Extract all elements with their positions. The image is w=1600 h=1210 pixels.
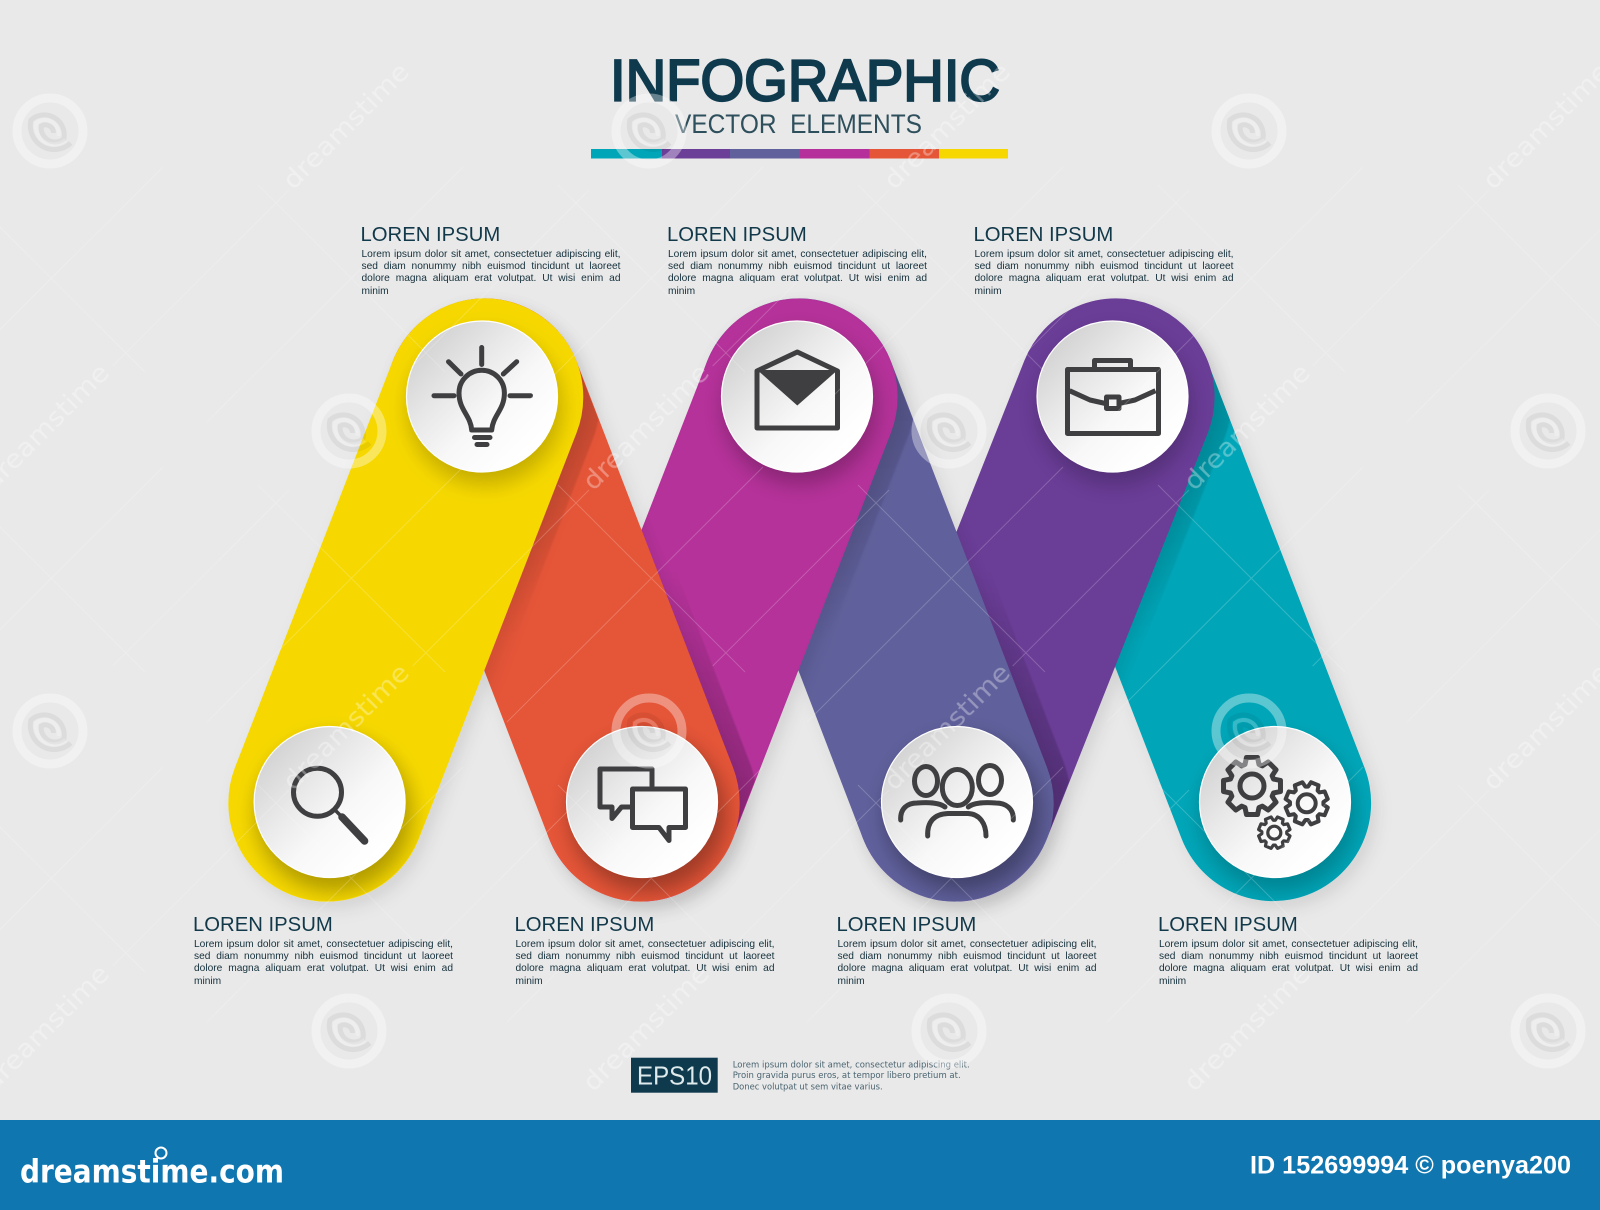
watermark text: dreamstime — [878, 658, 1017, 797]
text block: bottom 1: Lorem ipsum dolor sit amet, consectetuer adipiscing elit, — [194, 938, 453, 950]
text block: top 3: Lorem ipsum dolor sit amet, consectetuer adipiscing elit, — [974, 248, 1234, 260]
text block: top 2: dolore magna aliquam erat volutpat. Ut wisi enim ad — [668, 273, 927, 284]
watermark text: dreamstime — [277, 658, 416, 797]
text block: top 2: LOREN IPSUM — [667, 224, 807, 246]
title: INFOGRAPHIC — [610, 48, 1000, 114]
text block: bottom 4: minim — [1159, 976, 1186, 987]
text block: top 2 — [667, 224, 927, 297]
text block: bottom 4: sed diam nonummy nibh euismod tincidunt ut laoreet — [1159, 951, 1418, 962]
text block: bottom 1: LOREN IPSUM — [193, 914, 333, 936]
text block: bottom 4: dolore magna aliquam erat volutpat. Ut wisi enim ad — [1159, 963, 1418, 974]
EPS note text: Lorem ipsum dolor sit amet, consectetur adipiscing elit. — [733, 1060, 970, 1070]
text block: top 1 — [360, 224, 620, 297]
text block: bottom 2: dolore magna aliquam erat volutpat. Ut wisi enim ad — [516, 963, 774, 974]
text block: top 2: Lorem ipsum dolor sit amet, consectetuer adipiscing elit, — [668, 248, 927, 260]
text block: top 3 — [974, 224, 1234, 297]
icon disc: light bulb — [406, 321, 558, 472]
text block: bottom 3: sed diam nonummy nibh euismod tincidunt ut laoreet — [838, 951, 1096, 962]
footer banner — [0, 1120, 1600, 1210]
text block: bottom 3: LOREN IPSUM — [836, 914, 976, 936]
colour stripe under title — [591, 149, 1008, 158]
EPS10 badge: EPS10 — [637, 1060, 712, 1090]
text block: top 2: minim — [668, 286, 695, 297]
capsule: yellow — [229, 299, 583, 901]
icon disc: briefcase — [1037, 321, 1188, 472]
subtitle: VECTOR ELEMENTS — [675, 109, 922, 139]
text block: top 3: dolore magna aliquam erat volutpat. Ut wisi enim ad — [974, 273, 1234, 284]
EPS note text: Proin gravida purus eros, at tempor libero pretium at. — [733, 1071, 961, 1081]
disc shadows — [256, 331, 1356, 892]
watermark text: dreamstime — [1178, 358, 1317, 497]
watermark text: dreamstime — [577, 959, 716, 1098]
text block: bottom 1: minim — [194, 976, 221, 987]
text block: bottom 1: dolore magna aliquam erat volutpat. Ut wisi enim ad — [194, 963, 453, 974]
EPS note text: Donec volutpat ut sem vitae varius. — [733, 1082, 883, 1092]
text block: bottom 2 — [514, 914, 774, 987]
text block: bottom 2: sed diam nonummy nibh euismod tincidunt ut laoreet — [516, 951, 774, 962]
text block: bottom 2: LOREN IPSUM — [514, 914, 654, 936]
footer banner: dreamstime.com — [20, 1152, 284, 1190]
text block: bottom 4: Lorem ipsum dolor sit amet, consectetuer adipiscing elit, — [1159, 938, 1418, 950]
text block: top 2: sed diam nonummy nibh euismod tincidunt ut laoreet — [668, 261, 927, 272]
text block: top 1: dolore magna aliquam erat volutpat. Ut wisi enim ad — [362, 273, 620, 284]
text block: top 1: sed diam nonummy nibh euismod tincidunt ut laoreet — [362, 261, 620, 272]
text block: bottom 1: sed diam nonummy nibh euismod tincidunt ut laoreet — [194, 951, 453, 962]
watermark text: dreamstime — [878, 57, 1017, 196]
icon disc: people — [882, 726, 1032, 878]
text block: top 1: minim — [362, 286, 389, 297]
capsule: teal — [1018, 299, 1371, 901]
capsule: orange — [387, 299, 739, 901]
watermark spirals — [17, 98, 1581, 1064]
capsule: purple — [857, 299, 1214, 901]
text block: top 3: minim — [974, 286, 1002, 297]
watermark text: dreamstime — [1178, 959, 1317, 1098]
text block: bottom 3: dolore magna aliquam erat volutpat. Ut wisi enim ad — [838, 963, 1096, 974]
text block: bottom 3: minim — [838, 976, 865, 987]
capsule: magenta — [543, 299, 897, 901]
text block: top 1: Lorem ipsum dolor sit amet, consectetuer adipiscing elit, — [362, 248, 620, 260]
footer banner: ID 152699994 © poenya200 — [1250, 1152, 1571, 1180]
capsule: periwinkle — [701, 299, 1053, 901]
watermark text: dreamstime — [577, 358, 716, 497]
icon disc: envelope — [722, 321, 872, 472]
text block: bottom 2: minim — [516, 976, 543, 987]
icon disc: chat bubbles — [566, 726, 718, 878]
text block: top 3: LOREN IPSUM — [974, 224, 1113, 246]
text block: top 3: sed diam nonummy nibh euismod tincidunt ut laoreet — [974, 261, 1234, 272]
text block: top 1: LOREN IPSUM — [360, 224, 500, 246]
EPS note text — [733, 1060, 970, 1092]
watermark text: dreamstime — [277, 57, 416, 196]
text block: bottom 4 — [1158, 914, 1418, 987]
icon disc: magnifier — [254, 726, 405, 878]
text block: bottom 3: Lorem ipsum dolor sit amet, consectetuer adipiscing elit, — [838, 938, 1096, 950]
text block: bottom 1 — [193, 914, 453, 987]
text block: bottom 3 — [836, 914, 1096, 987]
text block: bottom 4: LOREN IPSUM — [1158, 914, 1298, 936]
icon disc: gears — [1200, 726, 1350, 878]
text block: bottom 2: Lorem ipsum dolor sit amet, consectetuer adipiscing elit, — [516, 938, 774, 950]
